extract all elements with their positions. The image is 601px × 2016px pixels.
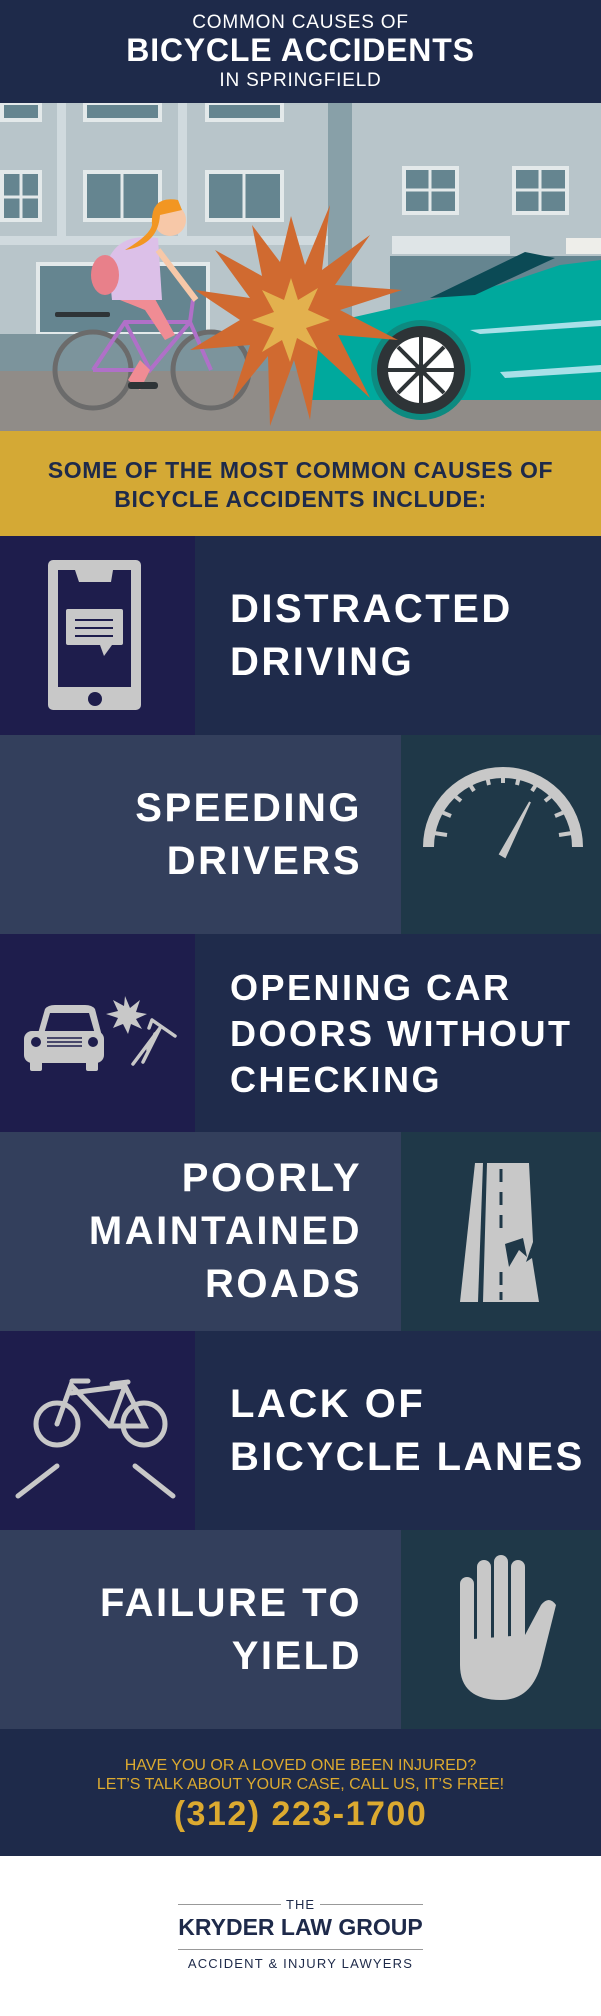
car	[300, 260, 601, 400]
header: COMMON CAUSES OF	[192, 12, 409, 33]
text	[100, 1580, 362, 1678]
panel: failure to yield	[0, 1530, 601, 1730]
icon: speedometer	[401, 735, 601, 934]
panel: poorly maintained roads	[0, 1132, 601, 1332]
text: OPENING CAR	[230, 966, 512, 1008]
text: FAILURE TO	[100, 1580, 362, 1624]
logo: KRYDER LAW GROUP	[178, 1914, 423, 1940]
header: IN SPRINGFIELD	[219, 70, 382, 91]
logo	[178, 1897, 423, 1971]
header: BICYCLE ACCIDENTS	[126, 32, 475, 68]
woman	[120, 289, 175, 340]
phone number: (312) 223-1700	[174, 1795, 427, 1833]
banner: intro: SOME OF THE MOST COMMON CAUSES OF	[48, 457, 553, 483]
text: DRIVERS	[167, 838, 362, 882]
text: DRIVING	[230, 640, 414, 684]
text: LACK OF	[230, 1382, 425, 1426]
panel: speeding drivers	[0, 735, 601, 935]
text: POORLY	[182, 1156, 362, 1200]
icon: cracked road	[401, 1132, 601, 1331]
icon: hand	[401, 1530, 601, 1729]
call to action: HAVE YOU OR A LOVED ONE BEEN INJURED?	[125, 1757, 476, 1774]
text	[89, 1156, 362, 1306]
explosion	[190, 205, 402, 426]
text	[230, 586, 513, 684]
logo: ACCIDENT & INJURY LAWYERS	[188, 1956, 413, 1971]
text	[230, 1382, 585, 1478]
text: DISTRACTED	[230, 586, 513, 630]
call to action: LET’S TALK ABOUT YOUR CASE, CALL US, IT’S FREE!	[97, 1776, 504, 1793]
text: CHECKING	[230, 1058, 442, 1100]
banner: intro: BICYCLE ACCIDENTS INCLUDE:	[114, 486, 487, 512]
text	[230, 966, 572, 1100]
panel: distracted driving	[0, 536, 601, 736]
text: ROADS	[205, 1262, 362, 1306]
text: BICYCLE LANES	[230, 1434, 585, 1478]
text: SPEEDING	[135, 786, 362, 830]
logo: THE	[286, 1897, 315, 1912]
panel: lack of bicycle lanes	[0, 1331, 601, 1531]
bike	[55, 332, 249, 408]
icon: bicycle	[0, 1331, 195, 1530]
icon: car and bike	[0, 934, 195, 1132]
icon: phone	[0, 536, 195, 735]
call to action	[0, 1729, 601, 1856]
panel: opening car doors	[0, 934, 601, 1134]
text: MAINTAINED	[89, 1209, 362, 1253]
text: YIELD	[232, 1634, 362, 1678]
text	[135, 786, 362, 882]
illustration: cyclist hit by car	[0, 103, 601, 431]
header	[0, 0, 601, 103]
banner: intro	[0, 431, 601, 536]
text: DOORS WITHOUT	[230, 1012, 572, 1054]
